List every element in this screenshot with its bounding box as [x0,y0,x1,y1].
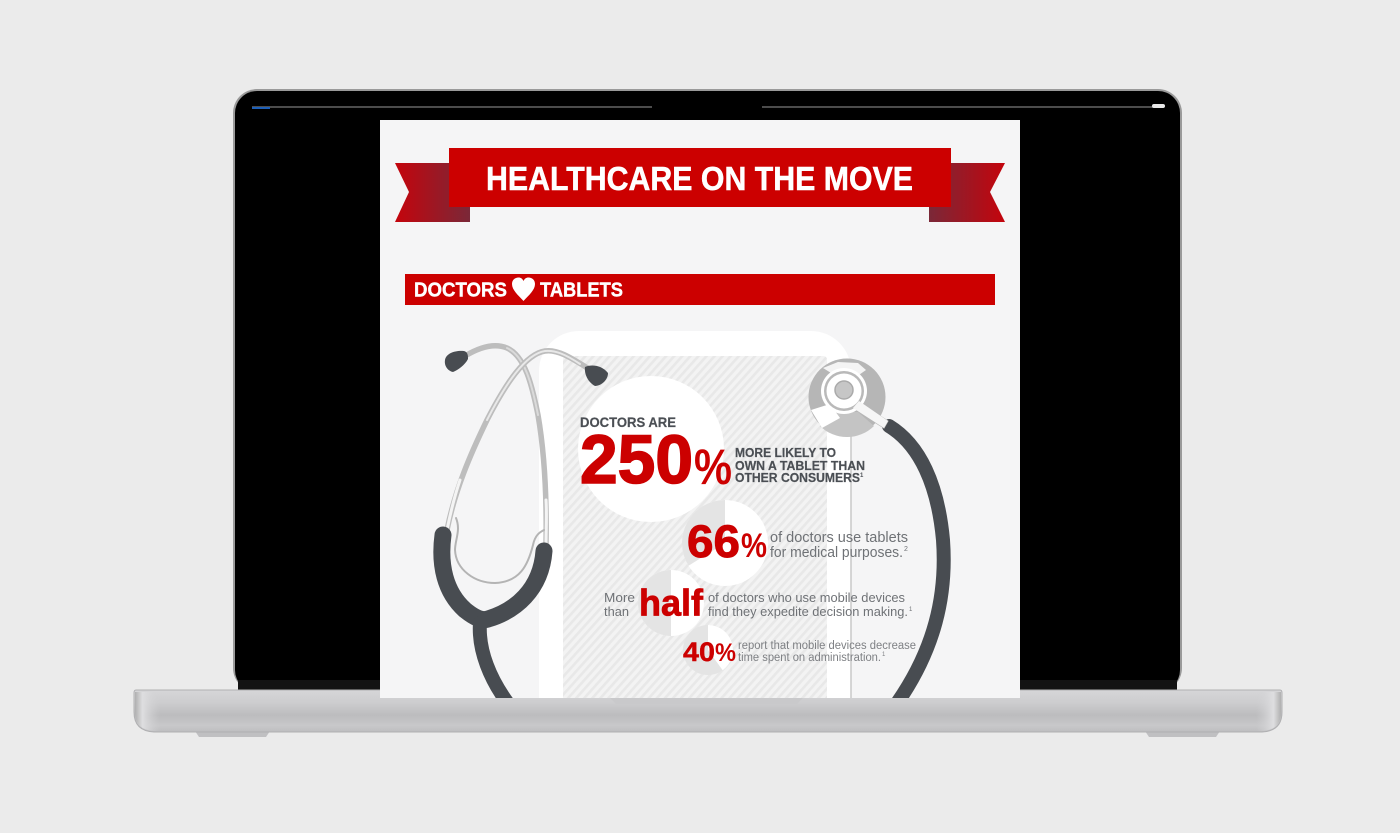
dark yoke [442,535,544,620]
stat: 250 percent: 250 [580,421,693,498]
tablet [539,331,852,698]
stat: 40 percent [683,625,916,675]
stat: 40 percent: % [715,639,736,667]
stat: 66 percent: 66 [687,516,740,567]
stat: 250 percent [578,376,865,522]
chest piece [808,358,888,437]
stat: half: More [604,590,635,605]
section heading bar: DOCTORS [414,278,507,302]
infographic page [380,120,1020,751]
dark stem [480,623,510,706]
stat: half: half [639,582,704,624]
laptop screen bezel [233,89,1182,692]
section heading bar [405,274,995,305]
stat: 40 percent: time spent on administration. [738,652,881,664]
stat: half [604,570,913,636]
stat: half: of doctors who use mobile devices [708,590,905,605]
chest tube [889,426,944,706]
icon: heart [512,278,535,301]
stat: 250 percent: 1 [860,473,864,479]
ear tubes [447,346,589,583]
stat: 66 percent: of doctors use tablets [770,530,908,546]
stat: 66 percent: % [741,527,767,565]
stat: half: than [604,604,629,619]
stat: 250 percent: OTHER CONSUMERS [735,471,860,485]
stat: 66 percent: for medical purposes. [770,545,903,561]
stat: 250 percent: MORE LIKELY TO [735,446,836,460]
stat: 40 percent: report that mobile devices decrease [738,640,916,652]
title ribbon [395,148,1005,222]
stat: 250 percent: % [694,439,732,495]
stat: 66 percent [682,500,908,586]
stat: 250 percent: DOCTORS ARE [580,414,676,430]
stat: 40 percent: 40 [683,637,715,667]
stat: half: find they expedite decision making. [708,604,908,619]
stethoscope [442,346,944,706]
title: HEALTHCARE ON THE MOVE [486,161,913,198]
section heading bar: TABLETS [540,278,623,302]
stat: 250 percent: OWN A TABLET THAN [735,459,865,473]
ear tips [445,351,608,386]
stat: 66 percent: 2 [904,546,908,553]
stat: 40 percent: 1 [882,652,886,658]
laptop base [134,690,1282,737]
stat: half: 1 [909,607,913,613]
